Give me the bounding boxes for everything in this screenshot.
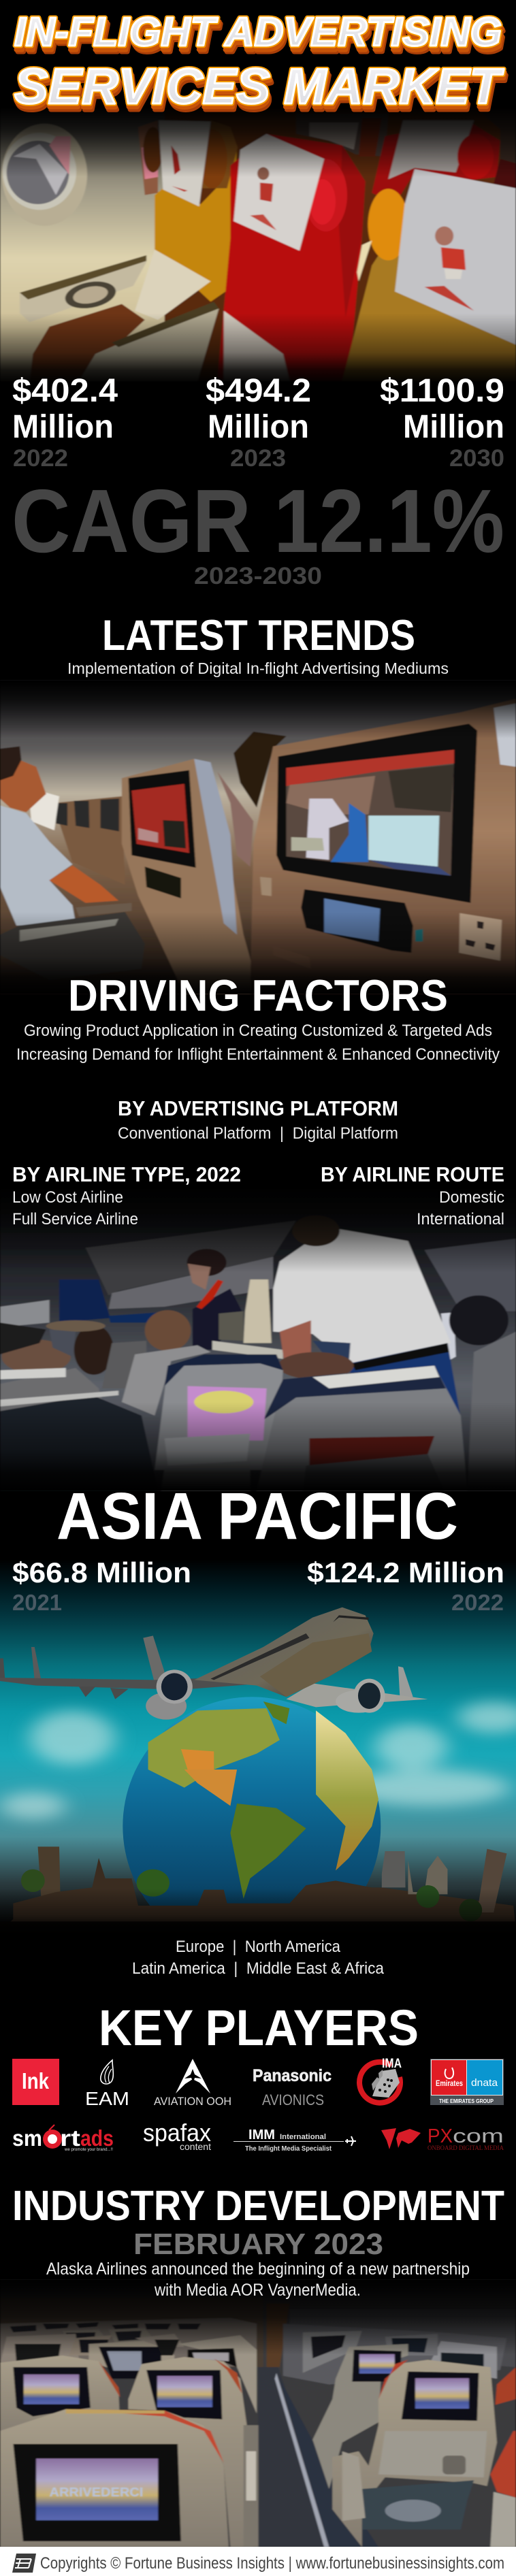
segment: by airline type [12, 1162, 241, 1228]
armrest console [20, 255, 146, 322]
cart and cups [244, 1279, 272, 1343]
segment: by airline type: BY AIRLINE TYPE, 2022 [12, 1162, 241, 1186]
title: SERVICES MARKET [14, 59, 504, 114]
segment: by airline route: Domestic [439, 1188, 504, 1207]
logo: smartads: sm [12, 2125, 42, 2151]
seats [50, 1329, 76, 1356]
heading: asia pacific: ASIA PACIFIC [57, 1479, 458, 1553]
stat: asia pacific 2021: $66.8 Million [12, 1556, 191, 1588]
title: IN-FLIGHT ADVERTISING [16, 14, 503, 59]
attendant [193, 1288, 242, 1350]
magazine [188, 1386, 267, 1441]
title: SERVICES MARKET [15, 63, 504, 118]
title [14, 10, 506, 120]
segment: by airline route: BY AIRLINE ROUTE [321, 1162, 504, 1186]
far seats [52, 796, 125, 885]
top right red seat [372, 120, 500, 204]
logo: smartads: ads [80, 2125, 114, 2151]
napkin and bag [135, 250, 210, 320]
logo: IMM International [233, 2127, 356, 2153]
segment: by airline route: International [417, 1210, 504, 1228]
stat: 2030 market size [380, 373, 504, 472]
segment: by advertising platform [118, 1096, 398, 1143]
stat: 2023 market size: 2023 [230, 445, 286, 472]
aisle floor [258, 2367, 339, 2547]
segment: by airline route [321, 1162, 504, 1228]
logo: smartads: rt [60, 2125, 80, 2151]
logo: PXCOM: com [453, 2125, 504, 2147]
logo: IMM International: The Inflight Media Specialist [245, 2145, 332, 2153]
logo: IMM International: IMM [248, 2127, 275, 2142]
yellow seat left [155, 145, 237, 301]
logo: IMM International: International [280, 2133, 326, 2141]
stat: 2022 market size [12, 373, 118, 472]
stat: 2022 market size: Million [12, 409, 114, 445]
logo: Aviation OOH [154, 2059, 231, 2108]
logo: Aviation OOH: AVIATION OOH [154, 2095, 231, 2108]
photo: cabin rows with screens [0, 2280, 516, 2547]
footer band [0, 2547, 516, 2576]
development text: Alaska Airlines announced the beginning of a new partnership [46, 2260, 470, 2279]
logo: PXCOM: PX [428, 2125, 453, 2147]
red seat [217, 134, 366, 381]
logo: Panasonic Avionics [253, 2066, 332, 2108]
person behind seat [233, 732, 287, 808]
photo: airline seats with headrest advertising [0, 105, 516, 385]
stat: 2022 market size: $402.4 [12, 373, 118, 409]
title: IN-FLIGHT ADVERTISING [14, 10, 502, 54]
stat: asia pacific 2022: 2022 [451, 1590, 504, 1615]
logo: spafax: spafax [143, 2119, 211, 2147]
heads [449, 1295, 509, 1346]
CAGR figure: 2023-2030 [194, 563, 322, 589]
man [0, 805, 76, 926]
front right seat [332, 2360, 497, 2547]
logo: PXCOM: ONBOARD DIGITAL MEDIA [428, 2145, 504, 2151]
stat: asia pacific 2022 [307, 1556, 504, 1615]
steward [273, 1227, 451, 1363]
logo: Emirates dnata: dnata [471, 2077, 498, 2089]
driving factor texts: Growing Product Application in Creating Customized & Targeted Ads [24, 1022, 492, 1040]
big seat [250, 699, 516, 994]
logo: smartads: we promote your brand...!! [64, 2148, 113, 2152]
front left seat [0, 2409, 229, 2547]
logo: Emirates dnata: Emirates [436, 2078, 463, 2088]
logo: Panasonic Avionics: Panasonic [253, 2066, 332, 2085]
photo: seatback screens [0, 681, 516, 994]
logo: PXCOM [381, 2125, 504, 2151]
right seat paper [395, 169, 516, 345]
stat: asia pacific 2022: $124.2 Million [307, 1556, 504, 1588]
logo: smartads: a [45, 2125, 59, 2151]
movie screen [287, 750, 454, 876]
logo: IMA [359, 2057, 402, 2103]
back rows left [0, 2318, 257, 2367]
logo: Emirates dnata [430, 2059, 504, 2105]
window [1, 124, 87, 226]
logo: Panasonic Avionics: AVIONICS [262, 2091, 324, 2108]
subheading: date: FEBRUARY 2023 [133, 2228, 383, 2261]
logo: EAM [85, 2060, 129, 2109]
logo: EAM: EAM [85, 2088, 129, 2109]
segment: by advertising platform: BY ADVERTISING PLATFORM [118, 1096, 398, 1120]
icon: Fortune Business Insights logo [12, 2554, 36, 2573]
stat: 2030 market size: 2030 [449, 445, 504, 472]
logo: Ink: Ink [22, 2068, 50, 2093]
other regions: Europe | North America [176, 1938, 341, 1956]
development text: with Media AOR VaynerMedia. [154, 2281, 361, 2300]
driving factor texts: Increasing Demand for Inflight Entertainment & Enhanced Connectivity [16, 1045, 500, 1064]
illustration: plane over globe [0, 1552, 516, 1977]
stat: 2023 market size [206, 373, 311, 472]
curtain [59, 1279, 110, 1322]
right yellow seat [342, 189, 516, 381]
title: SERVICES MARKET [16, 65, 506, 120]
stat: 2030 market size: Million [403, 409, 504, 445]
photo: cabin rows with screens: ARRIVEDERCI [50, 2485, 143, 2499]
heading: key players: KEY PLAYERS [99, 2000, 419, 2056]
title: SERVICES MARKET [14, 59, 504, 114]
segment: by advertising platform: Conventional Platform | Digital Platform [118, 1124, 398, 1143]
title: IN-FLIGHT ADVERTISING [17, 16, 504, 61]
heading: latest trends: LATEST TRENDS [102, 612, 415, 659]
clouds [0, 1701, 516, 1819]
logo: Emirates dnata: THE EMIRATES GROUP [439, 2098, 494, 2104]
city silhouettes [38, 1846, 61, 1924]
back rows right [283, 2324, 506, 2385]
handset [301, 890, 413, 953]
stat: 2023 market size: $494.2 [206, 373, 311, 409]
logo: smartads [12, 2125, 114, 2152]
segment: by airline type: Full Service Airline [12, 1210, 138, 1228]
other regions [132, 1938, 385, 1978]
logo: IMA: IMA [382, 2057, 402, 2071]
trend text: Implementation of Digital In-flight Advertising Mediums [67, 659, 449, 677]
stat: 2022 market size: 2022 [13, 445, 68, 472]
photo: cabin crew and passengers [0, 1184, 516, 1490]
stat: 2023 market size: Million [208, 409, 309, 445]
development text [46, 2260, 470, 2300]
second row right [312, 2344, 408, 2489]
background middle seats [296, 114, 388, 157]
stat: asia pacific 2021: 2021 [12, 1590, 62, 1615]
outlet and port [459, 913, 502, 961]
plane [143, 1635, 165, 1683]
driving factor texts [16, 1022, 500, 1064]
title: IN-FLIGHT ADVERTISING [14, 10, 502, 54]
stat: 2030 market size: $1100.9 [380, 373, 504, 409]
middle seat [122, 759, 260, 994]
other regions: Latin America | Middle East & Africa [132, 1959, 385, 1978]
red seat paper [233, 134, 324, 250]
segment: by airline type: Low Cost Airline [12, 1188, 123, 1207]
logo: Ink [12, 2059, 59, 2105]
right wall [425, 1239, 516, 1311]
heading: driving factors: DRIVING FACTORS [68, 971, 448, 1020]
stat: asia pacific 2021 [12, 1556, 191, 1615]
globe [123, 1697, 381, 1955]
second row left [0, 2355, 120, 2436]
logo: spafax: content [180, 2141, 211, 2152]
bezel [276, 723, 477, 903]
